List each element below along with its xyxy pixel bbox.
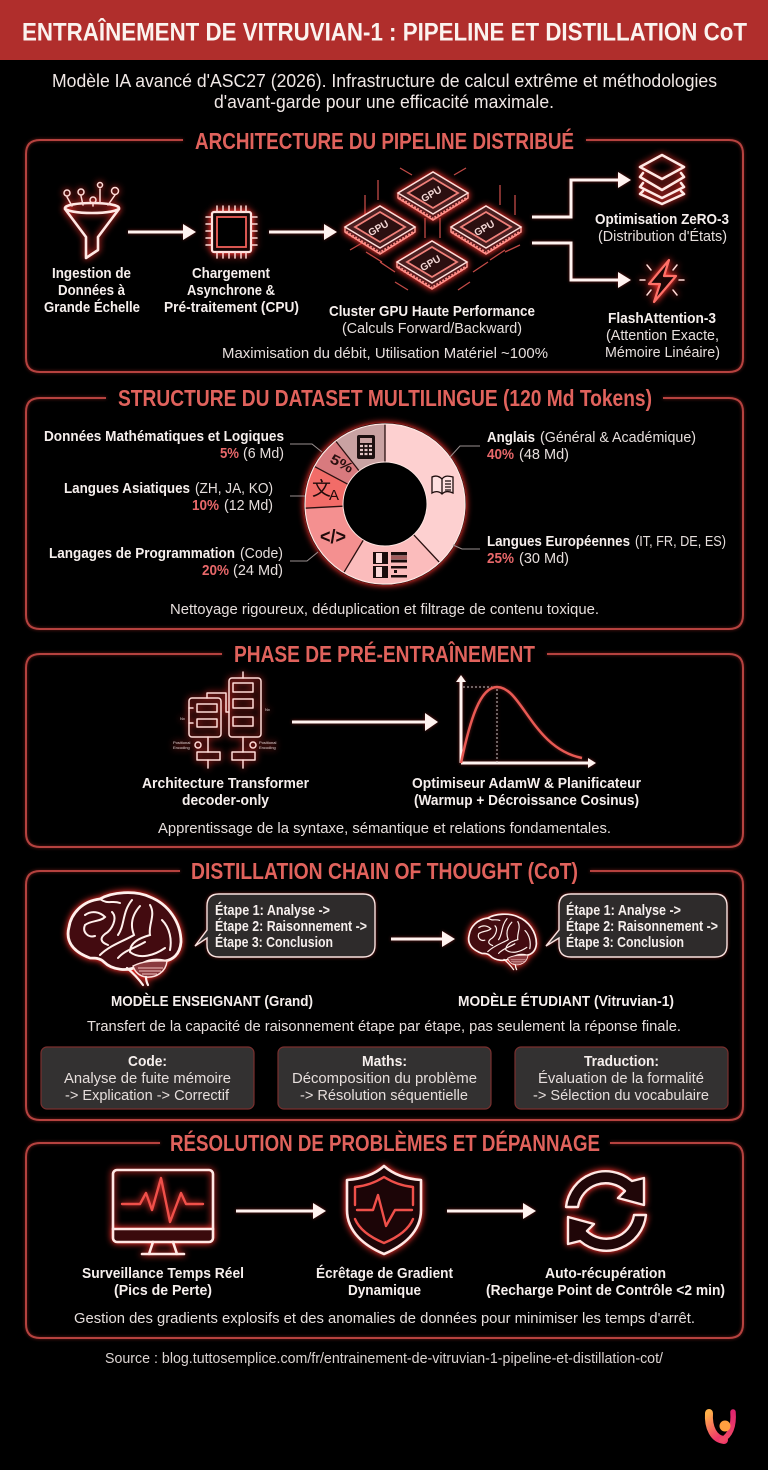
icon: monitor [113, 1170, 213, 1254]
icon: gpu cluster: GPU [367, 219, 391, 239]
label: optimiseur: (Warmup + Décroissance Cosinus) [414, 792, 639, 809]
label: anglais [487, 429, 696, 463]
intro text: d'avant-garde pour une efficacité maximale. [214, 92, 554, 112]
icon: gpu cluster: GPU [420, 185, 444, 205]
label: écrêtage [316, 1265, 453, 1299]
icon: transformer diagram [173, 672, 276, 768]
label: programmation: 20% [202, 562, 229, 579]
arrow: chip to cluster [269, 224, 337, 240]
heading: STRUCTURE DU DATASET MULTILINGUE (120 Md Tokens) [118, 385, 652, 411]
heading: RÉSOLUTION DE PROBLÈMES ET DÉPANNAGE [170, 1129, 600, 1156]
label: optimiseur [412, 775, 641, 809]
source line: Source : blog.tuttosemplice.com/fr/entrainement-de-vitruvian-1-pipeline-et-distillation-cot/ [105, 1351, 664, 1367]
speech bubble: teacher [195, 894, 375, 957]
icon: lightning bolt [640, 260, 684, 302]
donut outlines [305, 424, 440, 573]
label: mathématiques: 5% [220, 445, 239, 462]
label: auto-récupération: Auto-récupération [545, 1265, 666, 1282]
icon: book [432, 476, 453, 494]
label: mathématiques: Données Mathématiques et Logiques [44, 428, 284, 445]
label: optimiseur: Optimiseur AdamW & Planificateur [412, 775, 641, 792]
icon: transformer diagram: Encoding [259, 745, 276, 750]
slice: anglais 40% [385, 424, 465, 562]
donut chart [304, 423, 466, 585]
leader lines [290, 444, 480, 561]
arrow: transformer to optimizer [292, 713, 438, 731]
label: surveillance [82, 1265, 244, 1299]
label: langues asiatiques: (ZH, JA, KO) [195, 480, 273, 497]
label: langues asiatiques: Langues Asiatiques [64, 480, 190, 497]
card: traduction [515, 1047, 728, 1109]
label: flashattention-3 [605, 310, 720, 361]
icon: teacher brain [68, 893, 181, 985]
arrow: teacher to student [391, 931, 455, 947]
icon: translate: 文 [312, 479, 331, 500]
caption: Nettoyage rigoureux, déduplication et filtrage de contenu toxique. [170, 601, 599, 618]
icon: gpu cluster: GPU [473, 219, 497, 239]
arrow: branch to ZeRO-3 [532, 172, 631, 217]
logo [709, 1412, 733, 1440]
label: transformer [142, 775, 309, 809]
label: anglais: Anglais [487, 429, 535, 446]
card: maths: Maths: [362, 1053, 407, 1070]
icon: transformer diagram: Nx [180, 716, 185, 721]
icon: code: </> [320, 527, 346, 548]
arrow: funnel to chip [128, 224, 196, 240]
icon: flags [373, 552, 407, 578]
label: flashattention-3: (Attention Exacte, [606, 327, 719, 344]
speech bubble: student: Étape 3: Conclusion [566, 934, 684, 951]
title banner [0, 0, 768, 60]
label: ingestion [44, 265, 140, 316]
icon: recovery cycle [566, 1171, 646, 1251]
label: langues asiatiques: (12 Md) [224, 497, 273, 514]
icon: cpu chip [206, 206, 257, 258]
label: cluster gpu: (Calculs Forward/Backward) [342, 320, 522, 337]
label: cluster gpu: Cluster GPU Haute Performance [329, 303, 535, 320]
card: code: -> Explication -> Correctif [65, 1087, 230, 1104]
label: langues asiatiques [64, 480, 273, 514]
label: mathématiques: (6 Md) [243, 445, 284, 462]
speech bubble: student: Étape 2: Raisonnement -> [566, 918, 718, 935]
arrow: shield to recovery [447, 1203, 536, 1219]
slice: langues européennes 25% [344, 535, 440, 584]
panel: phase de pré-entraînement [26, 640, 743, 847]
slice: programmation 20% [305, 506, 363, 573]
label: anglais: 40% [487, 446, 514, 463]
label: programmation [49, 545, 283, 579]
card: code: Code: [128, 1053, 167, 1070]
label: ingestion: Données à [58, 282, 126, 299]
label: anglais: (Général & Académique) [540, 429, 696, 446]
card: maths: Décomposition du problème [292, 1070, 477, 1087]
intro text: Modèle IA avancé d'ASC27 (2026). Infrastructure de calcul extrême et méthodologies [52, 71, 717, 91]
label: langues européennes: (30 Md) [519, 550, 569, 567]
caption: Apprentissage de la syntaxe, sémantique et relations fondamentales. [158, 820, 611, 837]
label: surveillance: (Pics de Perte) [114, 1282, 212, 1299]
label: flashattention-3: Mémoire Linéaire) [605, 344, 720, 361]
label: programmation: Langages de Programmation [49, 545, 235, 562]
label: programmation: (Code) [240, 545, 283, 562]
label: programmation: (24 Md) [233, 562, 283, 579]
label: zero-3 [595, 211, 729, 245]
speech bubble: teacher: Étape 2: Raisonnement -> [215, 918, 367, 935]
icon: funnel [64, 182, 119, 258]
panel: résolution de problèmes [26, 1129, 743, 1338]
heading: DISTILLATION CHAIN OF THOUGHT (CoT) [191, 858, 578, 884]
intro text [52, 71, 717, 112]
slice: mathématiques [336, 424, 385, 471]
card: traduction: Traduction: [584, 1053, 659, 1070]
slice: 5% [314, 441, 359, 484]
speech bubble: teacher: Étape 1: Analyse -> [215, 902, 330, 919]
heading: PHASE DE PRÉ-ENTRAÎNEMENT [234, 640, 535, 667]
label: écrêtage: Écrêtage de Gradient [316, 1265, 453, 1282]
label: chargement: Asynchrone & [187, 282, 275, 299]
label: auto-récupération: (Recharge Point de Contrôle <2 min) [486, 1282, 725, 1299]
card: traduction: Évaluation de la formalité [538, 1070, 704, 1087]
label: 5%: 5% [328, 451, 357, 476]
icon: calculator [357, 435, 375, 459]
icon: transformer diagram: Positional [173, 740, 190, 745]
card: maths [278, 1047, 491, 1109]
panel: distillation chain of thought [26, 858, 743, 1120]
label: langues européennes: (IT, FR, DE, ES) [635, 533, 726, 550]
icon: transformer diagram: Positional [259, 740, 276, 745]
label: student: MODÈLE ÉTUDIANT (Vitruvian-1) [458, 993, 674, 1010]
label: langues européennes [487, 533, 726, 567]
card: maths: -> Résolution séquentielle [300, 1087, 468, 1104]
speech bubble: teacher: Étape 3: Conclusion [215, 934, 333, 951]
label: écrêtage: Dynamique [348, 1282, 421, 1299]
caption: Transfert de la capacité de raisonnement étape par étape, pas seulement la réponse finale. [87, 1018, 681, 1035]
card: code: Analyse de fuite mémoire [64, 1070, 231, 1087]
label: cluster gpu [329, 303, 535, 337]
label: langues européennes: 25% [487, 550, 514, 567]
panel: structure du dataset [26, 385, 743, 629]
label: anglais: (48 Md) [519, 446, 569, 463]
panel: architecture du pipeline [26, 127, 743, 372]
label: mathématiques [44, 428, 284, 462]
label: transformer: decoder-only [182, 792, 270, 809]
label: ingestion: Grande Échelle [44, 299, 140, 316]
label: auto-récupération [486, 1265, 725, 1299]
arrow: branch to FlashAttention-3 [532, 243, 631, 288]
label: flashattention-3: FlashAttention-3 [608, 310, 716, 327]
caption: Gestion des gradients explosifs et des anomalies de données pour minimiser les temps d'arrêt. [74, 1310, 695, 1327]
caption: Maximisation du débit, Utilisation Matériel ~100% [222, 345, 548, 362]
label: zero-3: (Distribution d'États) [598, 228, 727, 245]
icon: stack of layers [640, 155, 684, 204]
label: ingestion: Ingestion de [52, 265, 131, 282]
slice: langues asiatiques 10% [305, 466, 348, 508]
icon: gpu cluster: GPU [419, 254, 443, 274]
icon: translate: A [329, 487, 339, 504]
label: langues européennes: Langues Européennes [487, 533, 630, 550]
icon: shield [347, 1166, 421, 1254]
label: langues asiatiques: 10% [192, 497, 219, 514]
icon: transformer diagram: Nx [265, 707, 270, 712]
label: transformer: Architecture Transformer [142, 775, 309, 792]
heading: ARCHITECTURE DU PIPELINE DISTRIBUÉ [195, 127, 574, 154]
chart: learning rate schedule [456, 675, 596, 768]
card: code [41, 1047, 254, 1109]
speech bubble: student [546, 894, 727, 957]
label: zero-3: Optimisation ZeRO-3 [595, 211, 729, 228]
icon: transformer diagram: Encoding [173, 745, 190, 750]
label: chargement: Chargement [192, 265, 270, 282]
speech bubble: student: Étape 1: Analyse -> [566, 902, 681, 919]
label: teacher: MODÈLE ENSEIGNANT (Grand) [111, 993, 313, 1010]
label: chargement [164, 265, 299, 316]
card: traduction: -> Sélection du vocabulaire [533, 1087, 709, 1104]
icon: gpu cluster [345, 168, 521, 290]
arrow: monitor to shield [236, 1203, 326, 1219]
icon: student brain [469, 914, 536, 970]
label: surveillance: Surveillance Temps Réel [82, 1265, 244, 1282]
label: chargement: Pré-traitement (CPU) [164, 299, 299, 316]
